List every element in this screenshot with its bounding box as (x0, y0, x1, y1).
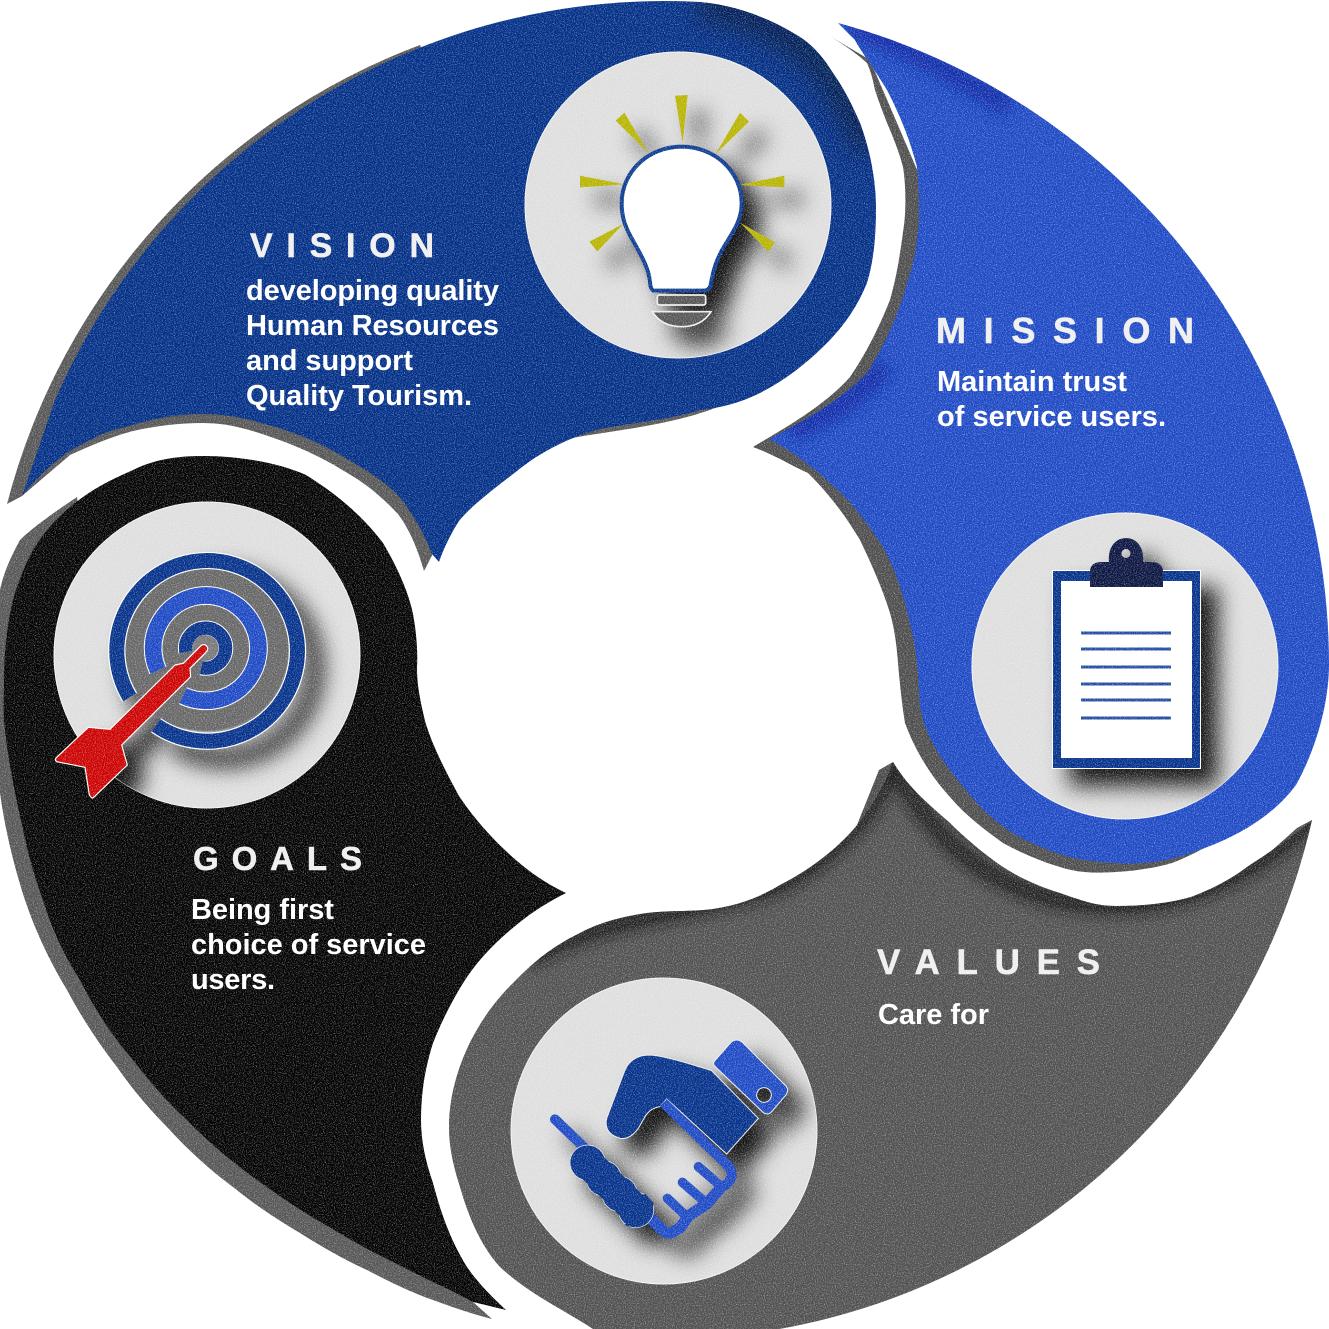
goals body text: Being first (191, 894, 334, 926)
icon: light bulb (580, 95, 784, 327)
icon: target with dart (55, 561, 297, 798)
goals rim (0, 497, 492, 1319)
text: values (877, 943, 1100, 1031)
heading: vision: VISION (250, 227, 434, 265)
mission body text (937, 366, 1166, 433)
panel: goals (0, 456, 566, 1319)
text: mission (936, 310, 1194, 433)
vision body text: and support (246, 345, 413, 377)
panel: values (449, 762, 1312, 1329)
values rim tips (855, 762, 1312, 880)
values dark edge (530, 762, 1312, 960)
panel: vision (7, 1, 876, 571)
goals body text: choice of service (191, 929, 426, 961)
vision shape (22, 1, 876, 562)
vision body text: developing quality (246, 275, 499, 307)
goals body text (191, 894, 426, 996)
heading: goals: GOALS (193, 840, 362, 877)
mission circle (972, 513, 1278, 819)
mission dark patches (790, 25, 1010, 432)
mission body text: of service users. (937, 401, 1166, 433)
values body text: Care for (878, 999, 989, 1031)
vision dark edge (700, 5, 868, 150)
goals circle (54, 502, 360, 808)
vision rim (7, 45, 730, 571)
values circle (511, 978, 817, 1284)
icon: clipboard (1052, 538, 1201, 769)
vision circle (525, 52, 831, 358)
vision body text (246, 275, 499, 412)
mission body text: Maintain trust (937, 366, 1127, 398)
icon: handshake (555, 1040, 788, 1233)
values shape (449, 762, 1312, 1329)
panel: mission (753, 23, 1329, 873)
heading: mission: MISSION (936, 310, 1194, 351)
goals body text: users. (191, 964, 275, 996)
mission shape (769, 23, 1329, 864)
heading: values: VALUES (877, 943, 1100, 982)
goals shape (4, 456, 566, 1310)
vision body text: Human Resources (246, 310, 499, 342)
mission rim (753, 32, 1206, 873)
text: goals (191, 840, 426, 996)
vision body text: Quality Tourism. (246, 380, 472, 412)
text: vision (246, 227, 499, 412)
